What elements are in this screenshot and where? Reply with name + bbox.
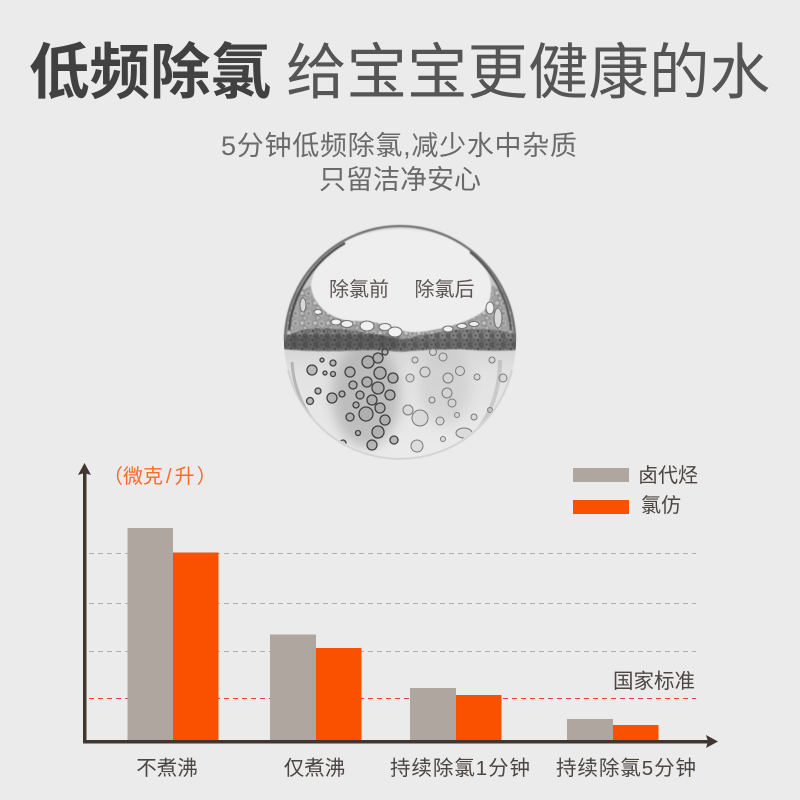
legend: chloroform: 氯仿 [641,494,681,517]
gridlines [89,554,696,698]
dark foam band [283,328,517,352]
rising bubbles after treatment [403,348,507,452]
unit label: （微克/升） [103,465,217,488]
lighter bubble column [419,345,471,425]
dark foam shade [283,335,400,349]
y axis arrow [78,463,91,743]
subtitle [221,131,577,195]
glass shoulder [284,227,516,336]
glass rim [285,226,515,478]
bar chart [78,463,718,780]
big top foam bubbles [300,298,502,337]
subtitle: 只留洁净安心 [319,165,481,195]
water sphere illustration [280,225,520,478]
bars: 5 minutes [567,719,658,740]
before / after labels: 除氯后 [414,278,474,301]
glass reflections [290,360,502,426]
legend: haloform: 卤代烃 [638,464,698,487]
title: 低频除氯 [29,38,271,106]
rising bubbles before treatment [306,349,398,450]
darker bubble column [332,343,400,447]
title: 给宝宝更健康的水 [286,38,770,106]
before / after labels [329,278,474,301]
bars: no boil [128,528,218,740]
bars: 1 minute [410,688,502,740]
subtitle: 5分钟低频除氯,减少水中杂质 [221,131,577,161]
category labels: 持续除氯5分钟 [556,757,696,780]
title [29,38,770,106]
category labels: 持续除氯1分钟 [390,757,530,780]
upper foam [284,285,517,342]
category labels: 不煮沸 [136,757,198,780]
category labels: 仅煮沸 [284,757,345,780]
national standard label: 国家标准 [613,670,695,693]
clear air region [311,229,491,332]
legend [573,464,698,517]
bars: boil only [270,634,362,740]
category labels [136,757,696,780]
x axis arrow [83,735,718,748]
water body [284,349,516,382]
before / after labels: 除氯前 [329,278,389,301]
